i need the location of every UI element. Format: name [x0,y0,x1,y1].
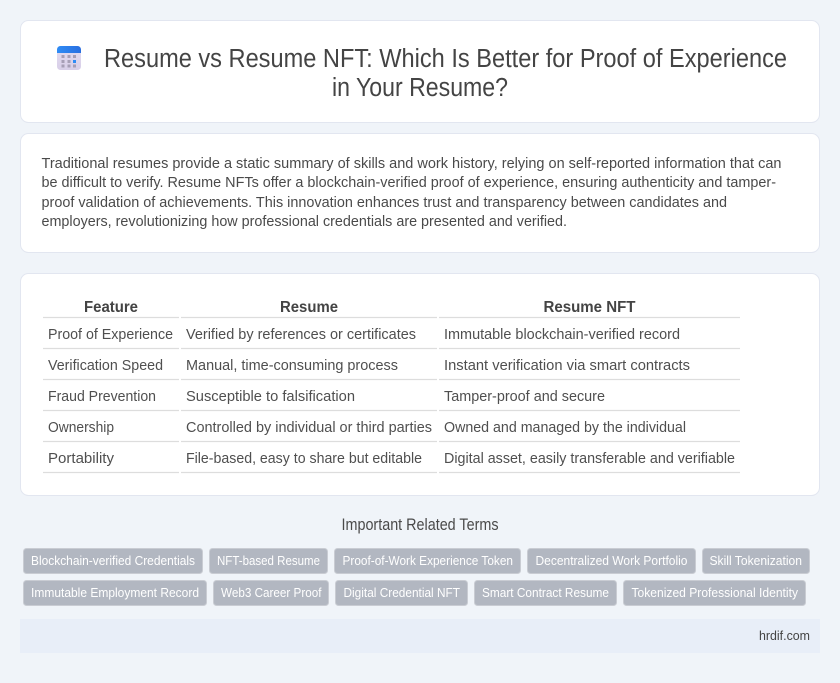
tag [210,548,328,574]
table header row [43,299,740,472]
tag: Immutable Employment Record [31,585,199,600]
tag: Web3 Career Proof [221,585,322,600]
table row: fraud prevention: Tamper-proof and secure [444,389,605,405]
panel: intro text [20,134,820,252]
table row: ownership: Ownership [48,420,114,436]
table header row: Resume NFT [544,299,636,316]
intro paragraph: be difficult to verify. Resume NFTs offer a blockchain-verified proof of experience, ensuring authenticity and tamper- [42,175,776,191]
table header row: Feature [84,299,138,316]
table row: verification speed [48,358,690,374]
tag [702,548,810,574]
table row: proof of experience: Immutable blockchain-verified record [444,327,680,343]
table row: ownership [48,420,686,436]
title: Resume vs Resume NFT: Which Is Better for Proof of Experience [104,45,787,73]
tag [528,548,696,574]
tag [334,548,520,574]
tag [624,580,806,606]
footer [20,619,820,653]
table row: portability: File-based, easy to share but editable [186,451,422,467]
table row: proof of experience: Verified by references or certificates [186,327,416,343]
related terms tags [24,548,810,606]
tag [214,580,328,606]
intro paragraph: employers, revolutionizing how professional credentials are presented and verified. [42,214,567,230]
tag: Digital Credential NFT [344,585,460,600]
tag: Skill Tokenization [710,553,802,568]
table row: ownership: Controlled by individual or third parties [186,420,432,436]
tag [336,580,468,606]
title: in Your Resume? [332,74,508,102]
intro paragraph: Traditional resumes provide a static summary of skills and work history, relying on self-reported information that can [42,156,782,172]
table row: proof of experience: Proof of Experience [48,327,173,343]
tag: Decentralized Work Portfolio [536,553,688,568]
title [104,45,787,102]
table row: verification speed: Instant verification via smart contracts [444,358,690,374]
table row: proof of experience [48,327,680,343]
table row: verification speed: Verification Speed [48,358,163,374]
tag: Tokenized Professional Identity [632,585,799,600]
table row: fraud prevention [48,389,605,405]
tag [24,548,202,574]
table row: portability: Digital asset, easily transferable and verifiable [444,451,735,467]
icon: calendar [57,46,81,70]
footer source: hrdif.com [759,628,810,643]
table row: ownership: Owned and managed by the individual [444,420,686,436]
table row: verification speed: Manual, time-consuming process [186,358,398,374]
tag [474,580,616,606]
panel: comparison table [20,274,820,496]
tag: Proof-of-Work Experience Token [342,553,513,568]
table header row: Resume [280,299,338,316]
table row: portability: Portability [48,451,115,467]
tag: Blockchain-verified Credentials [31,553,195,568]
header panel [20,20,820,122]
tag: Smart Contract Resume [482,585,609,600]
table row: fraud prevention: Fraud Prevention [48,389,156,405]
table row: portability [48,451,735,467]
heading: important related terms: Important Related Terms [342,516,498,534]
intro paragraph [42,156,782,230]
tag [24,580,206,606]
tag: NFT-based Resume [217,553,320,568]
intro paragraph: proof validation of achievements. This innovation enhances trust and transparency between candidates and [42,195,727,211]
table row: fraud prevention: Susceptible to falsification [186,389,355,405]
